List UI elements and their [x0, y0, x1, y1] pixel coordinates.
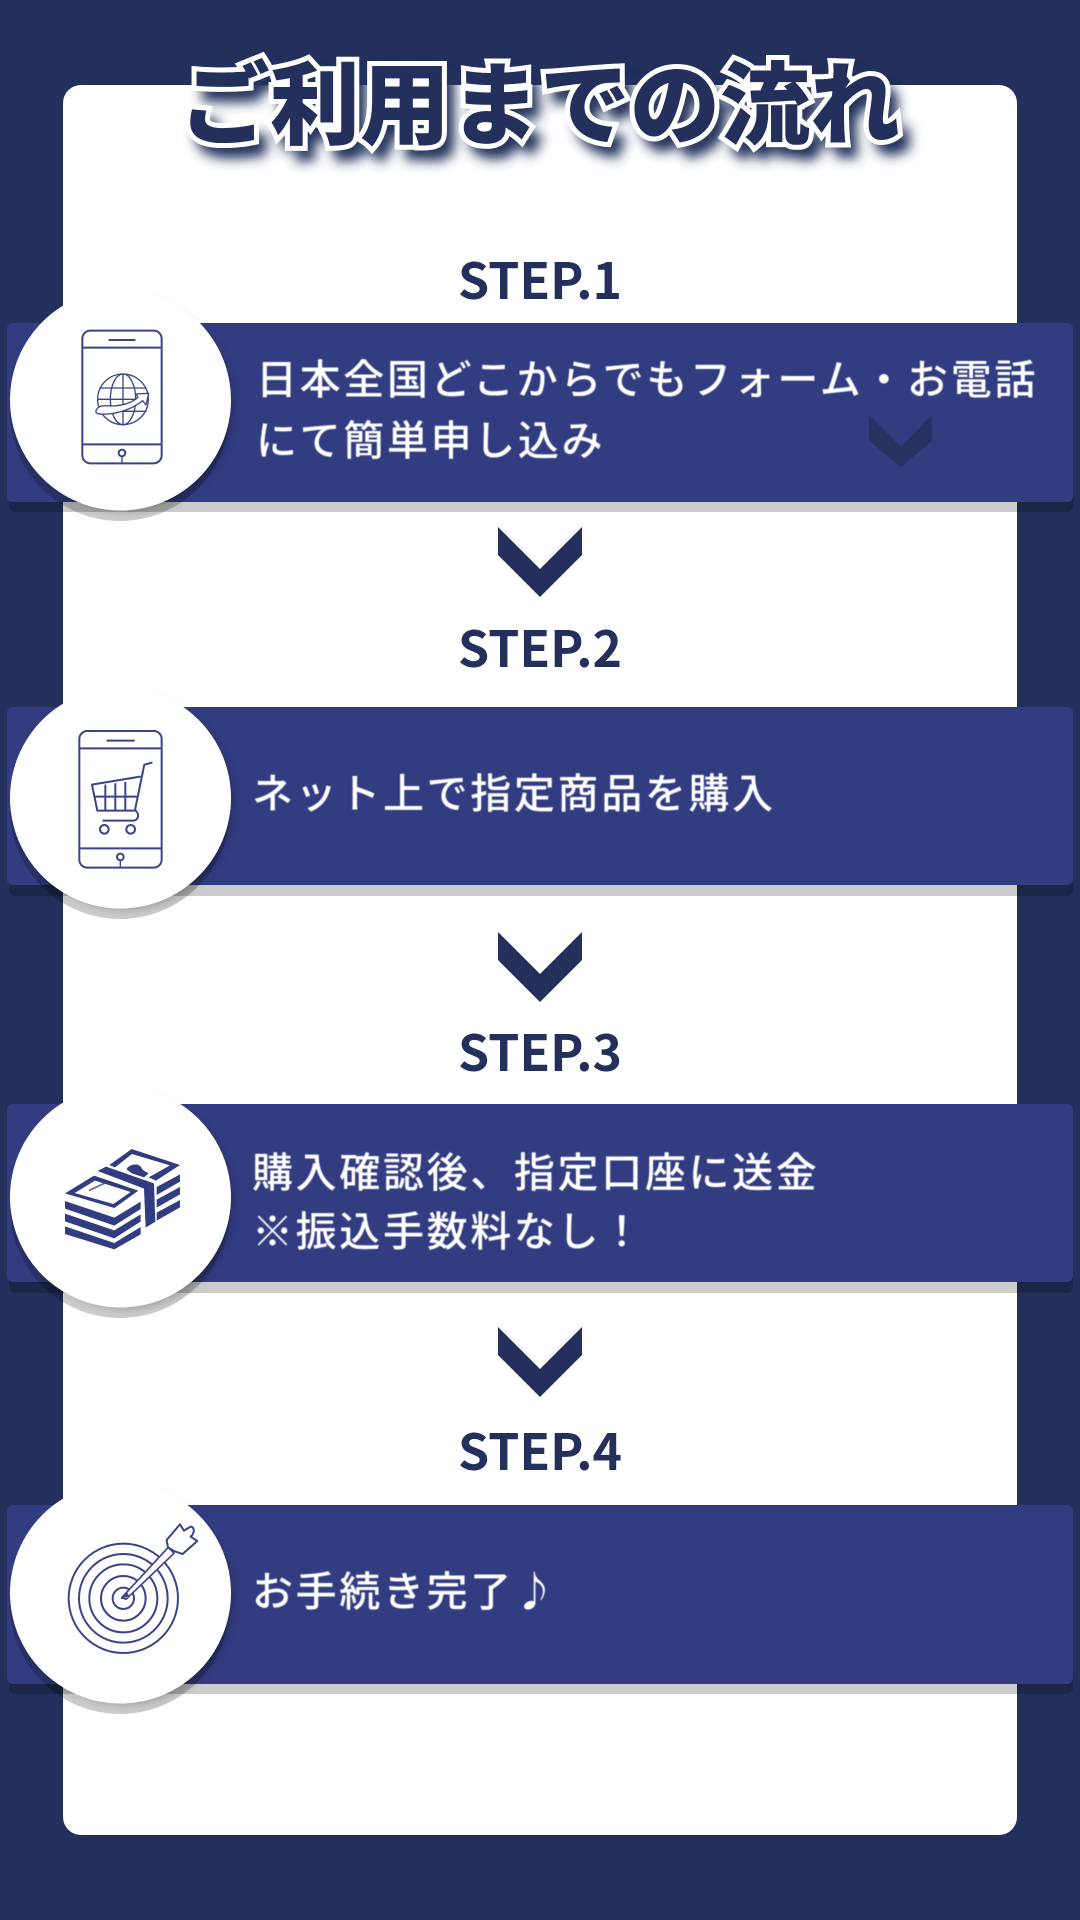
step 2 text: ネット上で指定商品を購入 [252, 760, 776, 820]
small chevron in band 1 [869, 415, 932, 467]
step 2 heading: STEP.2 [458, 610, 622, 682]
step 4 heading: STEP.4 [458, 1413, 622, 1485]
step 1 text: 日本全国どこからでもフォーム・お電話 [256, 346, 1038, 406]
step 1 text: にて簡単申し込み [256, 407, 605, 467]
arrow 3 [498, 1327, 582, 1397]
title: ご利用までの流れ [189, 45, 909, 175]
panel: step 3 band [7, 1104, 1073, 1293]
step 1 heading: STEP.1 [458, 242, 622, 314]
title: ご利用までの流れ [180, 33, 900, 163]
step 3 circle and icon [10, 1086, 232, 1318]
step 3 heading: STEP.3 [458, 1014, 622, 1086]
step 1 circle and icon [10, 290, 232, 521]
step 2 circle and icon [10, 688, 232, 919]
panel: step 4 band [7, 1505, 1073, 1694]
arrow 2 [498, 932, 582, 1002]
icon: target with arrow [69, 1524, 197, 1653]
step 3 text: ※振込手数料なし！ [252, 1198, 645, 1258]
step 3 text: 購入確認後、指定口座に送金 [252, 1139, 819, 1199]
icon: phone with cart [79, 731, 162, 868]
icon: stack of money [65, 1149, 180, 1249]
panel: step 2 band [7, 707, 1073, 896]
icon: phone with globe [82, 331, 162, 463]
step 4 circle and icon [10, 1482, 232, 1714]
panel: step 1 band [7, 323, 1073, 512]
step 4 text: お手続き完了♪ [252, 1558, 558, 1618]
arrow 1 [498, 527, 582, 597]
